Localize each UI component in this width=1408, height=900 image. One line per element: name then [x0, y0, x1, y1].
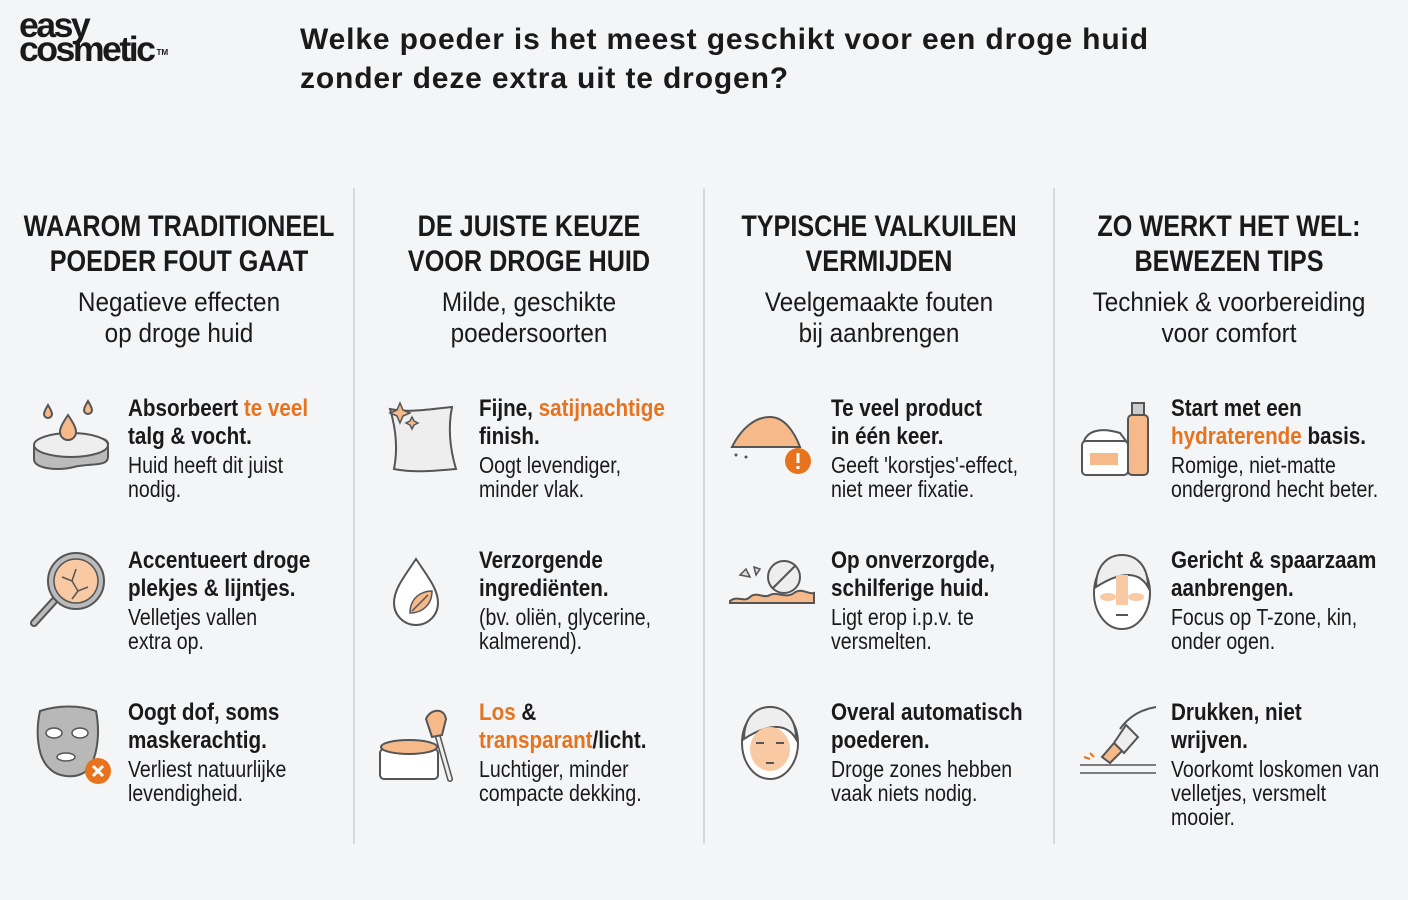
text — [479, 547, 651, 654]
text — [128, 395, 308, 502]
icon: mask — [36, 706, 111, 784]
text: in één keer. — [831, 423, 943, 450]
text: Verzorgende — [479, 547, 603, 574]
text — [128, 699, 286, 806]
text: nodig. — [128, 476, 181, 502]
text: Start met een — [1171, 395, 1302, 422]
subheading: Milde, geschikte — [442, 287, 616, 317]
heading: VOOR DROGE HUID — [408, 245, 650, 278]
icon: hand pressing brush — [1076, 699, 1168, 791]
text: aanbrengen. — [1171, 575, 1294, 602]
item: onverzorgde huid — [729, 547, 995, 654]
text — [1171, 547, 1376, 653]
heading: ZO WERKT HET WEL: — [1097, 210, 1361, 243]
text: ondergrond hecht beter. — [1171, 476, 1378, 502]
text: vaak niets nodig. — [831, 780, 977, 806]
text — [128, 547, 310, 654]
text: Overal automatisch — [831, 699, 1023, 726]
subheading: bij aanbrengen — [799, 318, 959, 348]
text — [479, 395, 665, 502]
text: extra op. — [128, 628, 204, 654]
subheading — [765, 287, 993, 348]
text: minder vlak. — [479, 476, 584, 502]
text: velletjes, versmelt — [1171, 780, 1326, 806]
text: Accentueert droge — [128, 547, 310, 574]
text: Op onverzorgde, — [831, 547, 995, 574]
text: Te veel product — [831, 395, 982, 422]
text: schilferige huid. — [831, 575, 989, 602]
icon: face — [741, 706, 799, 780]
text — [831, 395, 1018, 502]
text: versmelten. — [831, 628, 932, 654]
item: gericht aanbrengen — [1054, 547, 1404, 677]
text: Huid heeft dit juist — [128, 452, 283, 478]
item: verzorgende — [393, 547, 651, 654]
logo: easy — [19, 6, 88, 45]
subheading: Techniek & voorbereiding — [1093, 287, 1365, 317]
subheading: Negatieve effecten — [78, 287, 280, 317]
heading — [1097, 210, 1361, 278]
heading: POEDER FOUT GAAT — [50, 245, 308, 278]
text: talg & vocht. — [128, 423, 252, 450]
heading: VERMIJDEN — [805, 245, 953, 278]
text: ingrediënten. — [479, 575, 609, 602]
heading: DE JUISTE KEUZE — [418, 210, 640, 243]
subheading — [442, 287, 616, 348]
icon: cloth with sparkles — [388, 401, 458, 472]
text: Verliest natuurlijke — [128, 756, 286, 782]
text: Geeft 'korstjes'-effect, — [831, 452, 1018, 478]
text: Luchtiger, minder — [479, 756, 629, 782]
text: Gericht & spaarzaam — [1171, 547, 1376, 574]
text: levendigheid. — [128, 780, 243, 806]
text: Ligt erop i.p.v. te — [831, 604, 974, 630]
text — [831, 547, 995, 654]
text: maskerachtig. — [128, 727, 267, 754]
text: Los & — [479, 699, 536, 726]
text: compacte dekking. — [479, 780, 642, 806]
text: hydraterende basis. — [1171, 423, 1366, 450]
heading — [408, 210, 650, 278]
text: wrijven. — [1171, 727, 1248, 754]
subheading — [78, 287, 280, 348]
text: poederen. — [831, 727, 930, 754]
text: Absorbeert te veel — [128, 395, 308, 422]
icon: magnifier — [30, 552, 105, 627]
icon: powder jar and brush — [379, 710, 453, 782]
title — [300, 23, 1149, 95]
subheading: voor comfort — [1161, 318, 1297, 348]
panel: typische valkuilen — [729, 210, 1023, 806]
heading: TYPISCHE VALKUILEN — [741, 210, 1017, 243]
heading — [741, 210, 1017, 278]
title: zonder deze extra uit te drogen? — [300, 62, 789, 95]
text: Velletjes vallen — [128, 604, 257, 630]
logo: cosmetic TM — [19, 30, 168, 69]
text: Romige, niet-matte — [1171, 452, 1336, 478]
icon: powder pile with warning — [730, 416, 811, 474]
heading — [24, 210, 334, 278]
heading: BEWEZEN TIPS — [1134, 245, 1324, 278]
icon: face with T-zone — [1076, 547, 1168, 639]
subheading: op droge huid — [105, 318, 253, 348]
text: Fijne, satijnachtige — [479, 395, 665, 422]
item: satijn — [388, 395, 665, 502]
text — [1171, 699, 1379, 829]
text: niet meer fixatie. — [831, 476, 974, 502]
item: hydraterende basis — [1054, 395, 1404, 525]
logo — [19, 6, 168, 69]
text — [831, 699, 1023, 806]
text: Droge zones hebben — [831, 756, 1012, 782]
text: kalmerend). — [479, 628, 582, 654]
text: Oogt dof, soms — [128, 699, 279, 726]
item: los & transparant — [379, 699, 646, 806]
item: drukken niet wrijven — [1054, 699, 1404, 829]
item: oogt dof — [36, 699, 286, 806]
icon: drop with leaf — [393, 557, 439, 626]
icon: flaky skin — [729, 560, 815, 604]
text — [1171, 395, 1378, 501]
text — [479, 699, 646, 806]
text: transparant/licht. — [479, 727, 646, 754]
item: te veel product — [730, 395, 1018, 502]
item: absorbeert — [33, 395, 308, 502]
panel: waarom traditioneel poeder fout gaat — [24, 210, 334, 806]
heading: WAAROM TRADITIONEEL — [24, 210, 334, 243]
text: Focus op T-zone, kin, — [1171, 604, 1357, 630]
text: onder ogen. — [1171, 628, 1275, 654]
text: plekjes & lijntjes. — [128, 575, 295, 602]
item: accentueert — [30, 547, 310, 654]
text: Oogt levendiger, — [479, 452, 621, 478]
panel: de juiste keuze — [379, 210, 665, 806]
text: finish. — [479, 423, 540, 450]
subheading: Veelgemaakte fouten — [765, 287, 993, 317]
text: mooier. — [1171, 804, 1235, 830]
item: overal poederen — [741, 699, 1023, 806]
icon: sponge with drops — [33, 399, 109, 470]
text: Voorkomt loskomen van — [1171, 756, 1379, 782]
text: (bv. oliën, glycerine, — [479, 604, 651, 630]
panel: zo werkt het wel — [1080, 210, 1379, 830]
title: Welke poeder is het meest geschikt voor een droge huid — [300, 23, 1149, 56]
subheading — [1018, 287, 1408, 349]
subheading: poedersoorten — [451, 318, 607, 348]
text: Drukken, niet — [1171, 699, 1302, 726]
icon: cream jar and bottle — [1076, 395, 1168, 487]
